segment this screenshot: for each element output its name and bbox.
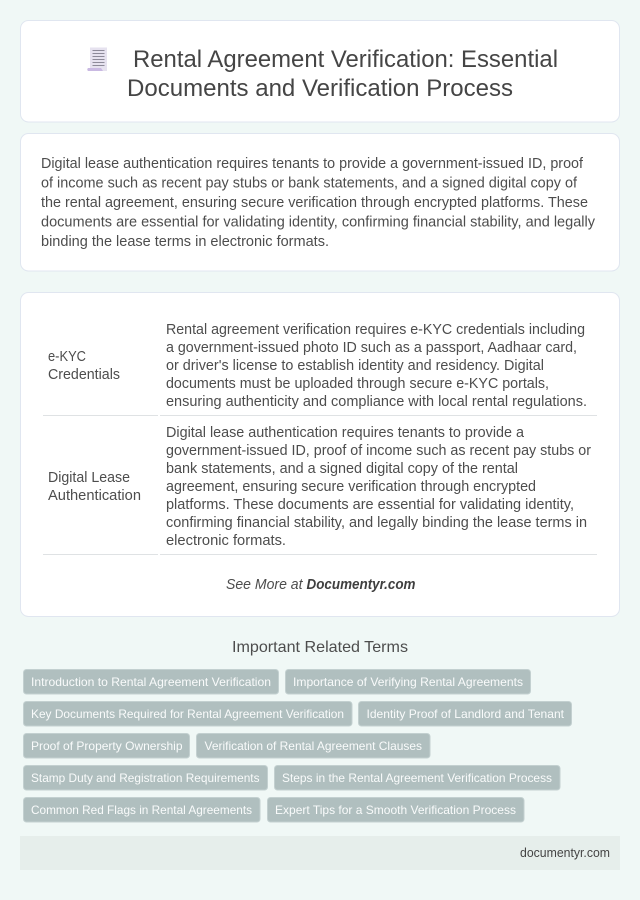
tag (24, 702, 352, 726)
row description: documents must be uploaded through secure e-KYC portals, (166, 376, 549, 392)
row label: e-KYC (48, 349, 86, 365)
tag (24, 734, 190, 758)
panel: related term tags (24, 670, 572, 822)
tag (24, 670, 278, 694)
icon: document scroll (87, 48, 107, 71)
intro text: of income such as recent pay stubs or bank statements, and a signed digital copy of (41, 176, 578, 192)
see more link: Documentyr.com (306, 577, 416, 593)
see more link (226, 577, 416, 593)
tag (24, 798, 260, 822)
row label: Digital Lease (48, 470, 130, 486)
intro text: binding the lease terms in electronic formats. (41, 234, 329, 250)
heading: important related terms: Important Related Terms (232, 639, 408, 656)
intro text: Digital lease authentication requires tenants to provide a government-issued ID, proof (41, 156, 584, 172)
row description: confirming financial stability, and legally binding the lease terms in (166, 515, 587, 531)
tag: Stamp Duty and Registration Requirements (31, 771, 260, 785)
panel: verification table (20, 292, 620, 616)
row description: electronic formats. (166, 533, 286, 549)
row: e-KYC Credentials (43, 322, 597, 416)
row description: Digital lease authentication requires tenants to provide a (166, 425, 525, 441)
intro text (41, 156, 596, 250)
tag: Verification of Rental Agreement Clauses (204, 739, 422, 753)
see more link: See More at (226, 577, 303, 593)
row description (166, 322, 587, 410)
tag: Common Red Flags in Rental Agreements (31, 803, 252, 817)
tag (196, 734, 430, 758)
intro text: the rental agreement, ensuring secure verification through encrypted platforms. These (41, 195, 588, 211)
row description (166, 425, 591, 549)
footer: documentyr.com (520, 845, 610, 860)
row label: Authentication (48, 488, 141, 504)
panel: intro paragraph (20, 134, 620, 271)
row description: platforms. These documents are essential for validating identity, (166, 497, 574, 513)
row label: Credentials (48, 367, 120, 383)
tag: Expert Tips for a Smooth Verification Process (275, 803, 516, 817)
tag: Key Documents Required for Rental Agreement Verification (31, 707, 344, 721)
row label (48, 349, 120, 383)
tag: Identity Proof of Landlord and Tenant (366, 707, 565, 721)
row: Digital Lease Authentication (43, 425, 597, 555)
row description: government-issued ID, proof of income such as recent pay stubs or (166, 443, 591, 459)
tag (286, 670, 530, 694)
row label (48, 470, 141, 504)
footer (20, 836, 620, 870)
intro text: documents are essential for validating identity, confirming financial stability, and legally (41, 214, 596, 230)
title: Documents and Verification Process (127, 75, 513, 102)
row description: bank statements, and a signed digital copy of the rental (166, 461, 518, 477)
row description: agreement, ensuring secure verification through encrypted (166, 479, 536, 495)
title: Rental Agreement Verification: Essential (133, 46, 558, 73)
row description: ensuring authenticity and compliance with local rental regulations. (166, 394, 587, 410)
tag: Importance of Verifying Rental Agreements (293, 675, 523, 689)
panel: title header (20, 20, 620, 122)
tag (268, 798, 524, 822)
tag: Proof of Property Ownership (31, 739, 183, 753)
title (127, 46, 558, 102)
tag (274, 766, 560, 790)
tag (358, 702, 572, 726)
row description: Rental agreement verification requires e-KYC credentials including (166, 322, 585, 338)
row description: or driver's license to establish identity and residency. Digital (166, 358, 544, 374)
tag (24, 766, 268, 790)
tag: Introduction to Rental Agreement Verification (31, 675, 271, 689)
row description: a government-issued photo ID such as a passport, Aadhaar card, (166, 340, 577, 356)
tag: Steps in the Rental Agreement Verification Process (282, 771, 552, 785)
